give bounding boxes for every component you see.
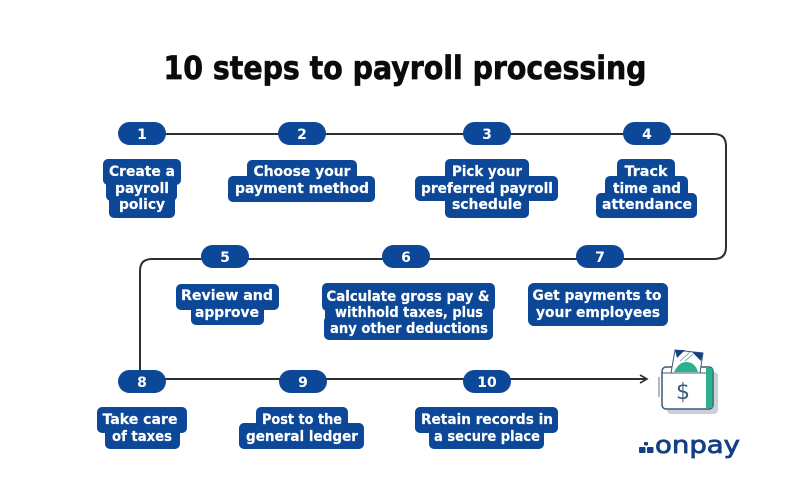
step 5: Review and — [181, 288, 273, 304]
step 10: Retain records in — [421, 412, 553, 428]
step 2: 2 — [297, 127, 307, 143]
connector line with arrow — [140, 134, 726, 383]
step 9: general ledger — [246, 429, 358, 445]
step 4: attendance — [602, 197, 692, 213]
step 5 — [176, 245, 279, 325]
step 7: Get payments to — [532, 288, 662, 304]
step 8: of taxes — [112, 429, 172, 445]
step 7 — [528, 245, 668, 326]
step 2: payment method — [235, 181, 369, 197]
icon: wallet with dollar bill — [659, 350, 718, 414]
logo: onpay: onpay — [655, 431, 740, 459]
step 3: Pick your — [452, 164, 522, 180]
step 5: 5 — [220, 250, 230, 266]
step 1: payroll — [115, 181, 169, 197]
step 5: approve — [195, 305, 259, 321]
step 1: 1 — [137, 127, 147, 143]
step 8: 8 — [137, 375, 147, 391]
step 7: your employees — [536, 305, 660, 321]
step 10: a secure place — [434, 429, 540, 445]
step 6 — [322, 245, 495, 340]
step 10 — [415, 370, 558, 449]
step 6: Calculate gross pay & — [326, 289, 490, 305]
step 8: Take care — [102, 412, 178, 428]
step 4: 4 — [642, 127, 652, 143]
step 3: 3 — [482, 127, 492, 143]
step 3: preferred payroll — [421, 181, 553, 197]
icon: wallet with dollar bill: $ — [676, 380, 690, 405]
step 2: Choose your — [254, 164, 351, 180]
step 6: 6 — [401, 250, 411, 266]
step 4: time and — [613, 181, 681, 197]
step 9 — [239, 370, 364, 449]
step 3: schedule — [452, 197, 522, 213]
step 9: 9 — [298, 375, 308, 391]
step 10: 10 — [477, 375, 497, 391]
title: 10 steps to payroll processing — [164, 49, 646, 87]
step 4 — [596, 122, 697, 218]
step 1 — [103, 122, 181, 218]
step 1: policy — [119, 197, 165, 213]
step 8 — [97, 370, 187, 449]
step 9: Post to the — [262, 412, 342, 428]
step 7: 7 — [595, 250, 605, 266]
step 6: withhold taxes, plus — [335, 305, 483, 321]
step 3 — [415, 122, 558, 218]
step 1: Create a — [109, 164, 175, 180]
step 6: any other deductions — [330, 321, 488, 337]
step 2 — [228, 122, 375, 202]
step 4: Track — [624, 164, 668, 180]
